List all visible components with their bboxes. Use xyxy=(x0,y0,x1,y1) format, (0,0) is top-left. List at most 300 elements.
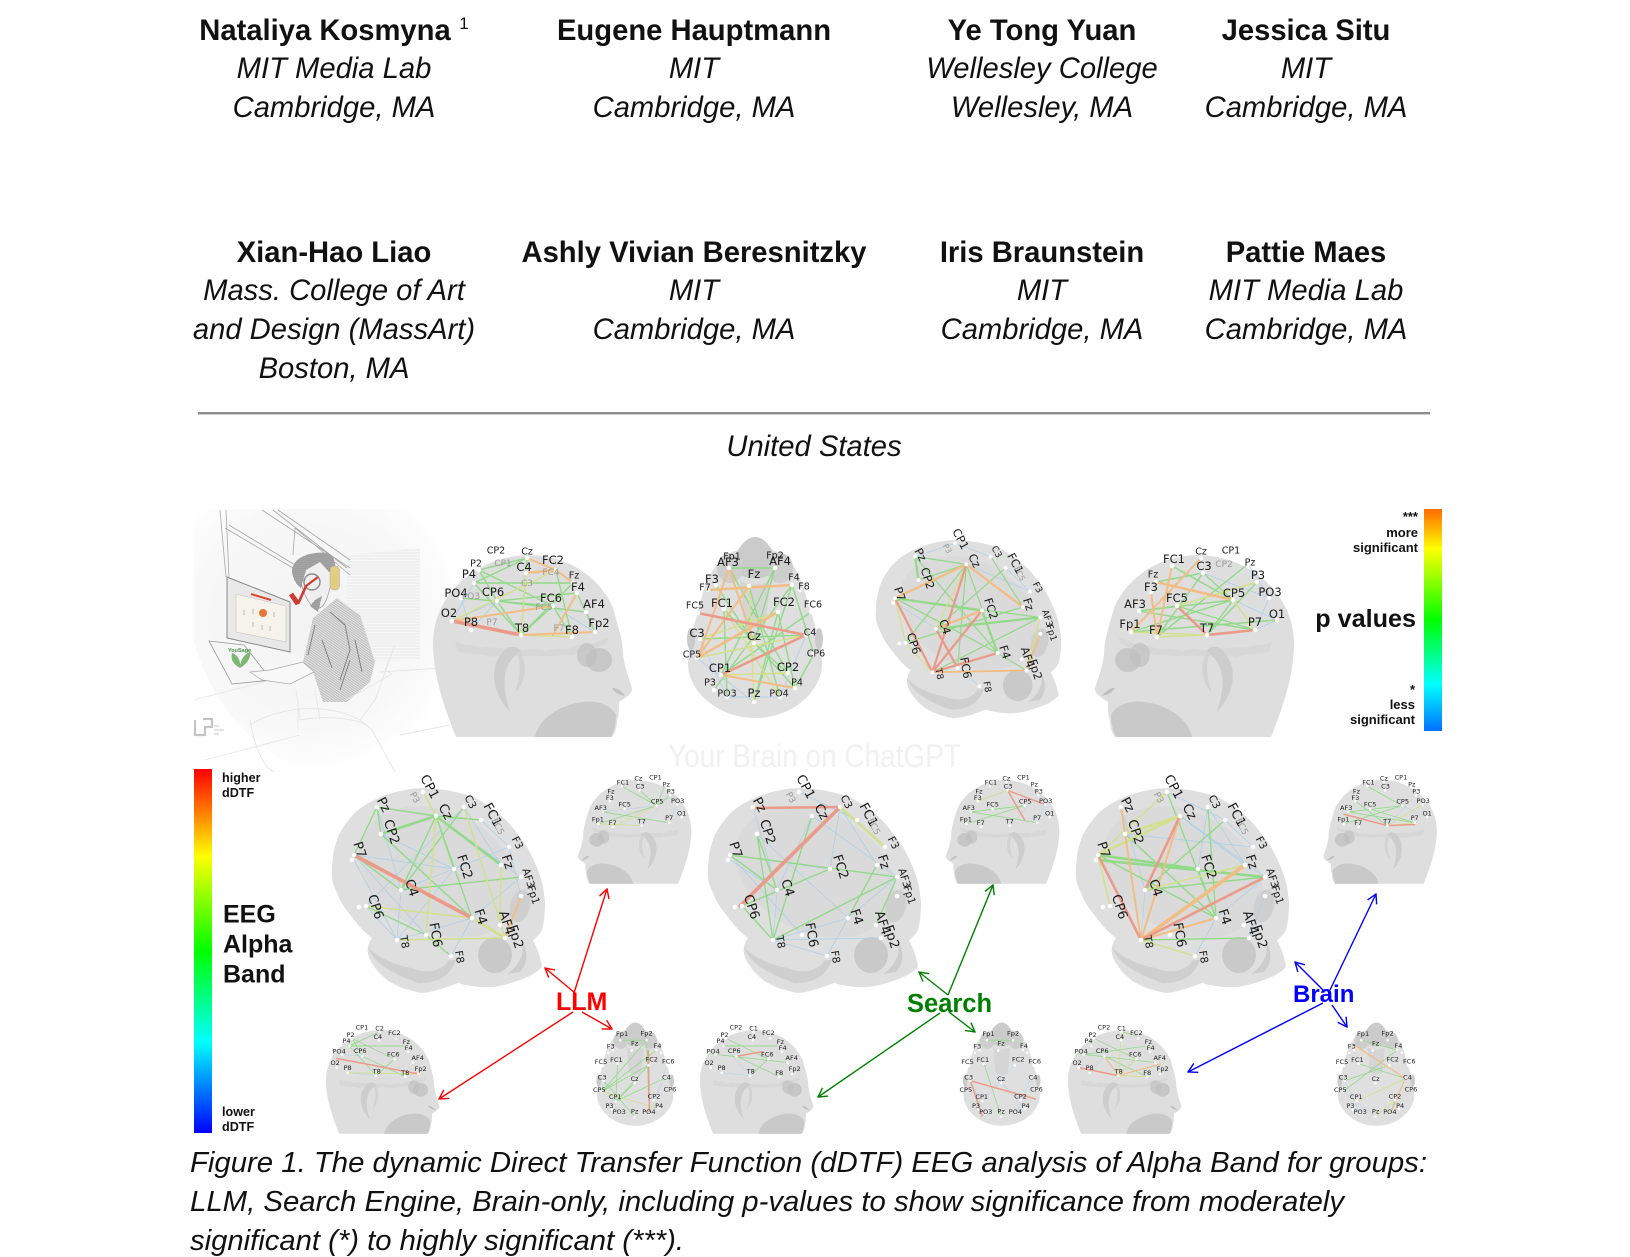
illustration: person wearing EEG at a computer: YouSage xyxy=(228,648,251,654)
small left-side head: Search: Cz xyxy=(1002,774,1011,782)
small top-view head: Search: Cz xyxy=(997,1075,1006,1083)
small left-side head: Search: CP1 xyxy=(1017,774,1030,782)
small top-view head: Search: PO4 xyxy=(1009,1108,1022,1116)
small left-side head: Search: Fz xyxy=(975,787,983,795)
small right-side head: Search: F4 xyxy=(779,1044,787,1052)
big three-quarter head: Brain: Pz xyxy=(1117,795,1137,815)
brain head: top view, top row: CP6 xyxy=(807,648,825,660)
big three-quarter head: Brain: P7 xyxy=(1093,840,1113,860)
small right-side head: Search: P8 xyxy=(718,1064,726,1072)
big three-quarter head: Brain: AF3 xyxy=(1263,867,1281,889)
small right-side head: Brain: F4 xyxy=(1147,1044,1155,1052)
small top-view head: LLM: P4 xyxy=(655,1102,663,1110)
brain head: three-quarter view, top row: Cz xyxy=(965,552,983,570)
brain head: top view, top row: F8 xyxy=(798,582,810,592)
small top-view head: Search: FC5 xyxy=(961,1058,974,1066)
brain head: left side view, top row: CP2 xyxy=(1215,560,1233,570)
brain head: left side view, top row: C3 xyxy=(1196,559,1212,573)
big three-quarter head: Brain: Fp2 xyxy=(1248,923,1270,951)
big three-quarter head: Search: AF4 xyxy=(871,909,893,937)
p values colour bar and legend: *** xyxy=(1403,509,1419,524)
small left-side head: LLM: Cz xyxy=(634,774,643,782)
brain head: right side view, top row: O2 xyxy=(441,606,457,620)
figure caption: LLM, Search Engine, Brain-only, including p-values to show significance from moderately xyxy=(190,1186,1346,1218)
brain head: top view, top row xyxy=(683,537,825,718)
small right-side head: LLM: P4 xyxy=(342,1037,351,1045)
author: Iris Braunstein xyxy=(940,237,1144,346)
p values colour bar and legend: significant xyxy=(1353,540,1419,555)
brain head: top view, top row: C4 xyxy=(804,628,816,638)
p values colour bar and legend: p values xyxy=(1315,605,1416,633)
author: Ashly Vivian Beresnitzky: MIT xyxy=(669,275,721,307)
p values colour bar and legend: more xyxy=(1386,525,1418,540)
brain head: top view, top row: P4 xyxy=(791,678,803,688)
small top-view head: Brain: Fp2 xyxy=(1382,1029,1394,1037)
small top-view head: Search: FC1 xyxy=(977,1056,989,1064)
big three-quarter head: Search: Fz xyxy=(874,853,892,871)
EEG alpha band colour bar and legend: higher xyxy=(222,771,261,785)
brain head: three-quarter view, top row: CP1 xyxy=(949,526,971,552)
small top-view head: LLM: FC5 xyxy=(595,1058,607,1066)
brain head: left side view, top row: PO3 xyxy=(1258,585,1282,599)
small right-side head: LLM: Fp2 xyxy=(415,1065,427,1073)
small left-side head: Search: P7 xyxy=(1033,814,1041,822)
brain head: three-quarter view, top row xyxy=(876,526,1061,718)
illustration: person wearing EEG at a computer xyxy=(194,509,462,772)
small right-side head: Brain: F8 xyxy=(1143,1069,1151,1077)
author: Ye Tong Yuan: Wellesley, MA xyxy=(951,92,1133,124)
big three-quarter head: LLM xyxy=(332,772,545,993)
brain head: top view, top row: CP1 xyxy=(709,661,731,675)
small top-view head: LLM: Cz xyxy=(631,1075,639,1083)
arrows: Search xyxy=(818,885,993,1097)
small right-side head: Search: Fz xyxy=(777,1038,785,1046)
small top-view head: Search: Fz xyxy=(998,1040,1005,1048)
brain head: left side view, top row xyxy=(1095,546,1294,737)
brain head: right side view, top row: FC6 xyxy=(540,591,562,605)
big three-quarter head: Search: P3 xyxy=(783,791,797,805)
big three-quarter head: LLM: CP2 xyxy=(380,818,402,846)
brain head: three-quarter view, top row: C3 xyxy=(989,544,1003,560)
big three-quarter head: Search: C3 xyxy=(837,793,855,811)
author: Ye Tong Yuan: Ye Tong Yuan xyxy=(948,15,1136,47)
big three-quarter head: Search: FC2 xyxy=(829,853,851,881)
brain head: left side view, top row: F7 xyxy=(1149,623,1163,637)
small top-view head: Brain xyxy=(1334,1023,1417,1126)
small right-side head: Search: FC6 xyxy=(761,1051,774,1059)
small left-side head: Search: F3 xyxy=(974,794,982,802)
EEG alpha band colour bar and legend xyxy=(194,769,294,1134)
small top-view head: Brain: FC6 xyxy=(1403,1057,1416,1065)
small right-side head: Brain: CP2 xyxy=(1098,1024,1110,1032)
small left-side head: Search: AF3 xyxy=(963,804,975,812)
small right-side head: Search xyxy=(700,1024,813,1134)
small left-side head: Search: CP5 xyxy=(1019,798,1032,806)
small top-view head: Search: F3 xyxy=(973,1043,981,1051)
brain head: right side view, top row: C3 xyxy=(521,579,533,589)
big three-quarter head: Search: F3 xyxy=(885,835,901,851)
brain head: top view, top row: P3 xyxy=(704,678,716,688)
small left-side head: Brain: P3 xyxy=(1412,787,1420,795)
author: Xian-Hao Liao: Xian-Hao Liao xyxy=(237,237,431,269)
label: Brain: Brain xyxy=(1293,981,1354,1008)
small top-view head: Brain: P3 xyxy=(1346,1102,1355,1110)
brain head: right side view, top row: CP2 xyxy=(487,546,505,556)
author: Jessica Situ: MIT xyxy=(1281,53,1333,85)
brain head: right side view, top row: FC2 xyxy=(542,553,564,567)
small right-side head: LLM: FC2 xyxy=(388,1029,401,1037)
small left-side head: LLM: O1 xyxy=(677,810,686,818)
small top-view head: LLM: C4 xyxy=(662,1073,671,1081)
brain head: top view, top row: FC5 xyxy=(686,600,704,612)
brain head: left side view, top row: P7 xyxy=(1248,615,1262,629)
EEG alpha band colour bar and legend: Band xyxy=(223,960,286,988)
brain head: three-quarter view, top row: FC5 xyxy=(1012,565,1027,583)
small left-side head: LLM: PO3 xyxy=(671,797,684,805)
arrows: LLM xyxy=(439,889,612,1099)
small left-side head: Search: PO3 xyxy=(1039,797,1052,805)
big three-quarter head: Brain: C3 xyxy=(1205,793,1223,811)
brain head: top view, top row: Pz xyxy=(748,686,760,700)
small top-view head: Search: P4 xyxy=(1022,1102,1030,1110)
big three-quarter head: Brain: FC6 xyxy=(1169,921,1189,949)
author: Ye Tong Yuan xyxy=(926,15,1158,124)
big three-quarter head: LLM: C4 xyxy=(401,877,421,899)
small right-side head: LLM: CP6 xyxy=(354,1047,367,1055)
small right-side head: Brain: PO4 xyxy=(1074,1048,1088,1056)
logo: MIT Media Lab: lab xyxy=(214,732,219,736)
small right-side head: Search: AF4 xyxy=(786,1054,798,1062)
small top-view head: Brain: Pz xyxy=(1372,1107,1380,1115)
small right-side head: Search: C1 xyxy=(749,1024,758,1032)
small right-side head: Brain: Fz xyxy=(1145,1038,1153,1046)
small left-side head: Brain: Fz xyxy=(1353,787,1361,795)
brain head: right side view, top row: Fp2 xyxy=(588,616,610,630)
small top-view head: Search: FC6 xyxy=(1028,1057,1041,1065)
author: Eugene Hauptmann xyxy=(557,15,831,124)
small right-side head: Brain: C4 xyxy=(1115,1033,1124,1041)
small top-view head: Search: F4 xyxy=(1020,1042,1028,1050)
small left-side head: Brain: Pz xyxy=(1408,781,1416,789)
author: Iris Braunstein: Iris Braunstein xyxy=(940,237,1144,269)
small right-side head: Search: CP6 xyxy=(728,1047,741,1055)
small right-side head: Brain xyxy=(1068,1024,1181,1134)
small left-side head: Brain: C3 xyxy=(1381,782,1390,790)
small top-view head: Brain: F3 xyxy=(1348,1043,1356,1051)
brain head: top view, top row: FC2 xyxy=(773,595,795,609)
small top-view head: LLM: Fp1 xyxy=(616,1030,628,1038)
brain head: top view, top row: F7 xyxy=(699,582,711,594)
big three-quarter head: Search: FC5 xyxy=(865,817,881,837)
country line: United States xyxy=(726,431,902,463)
small top-view head: Brain: F4 xyxy=(1394,1042,1402,1050)
small left-side head: LLM: P7 xyxy=(665,814,673,822)
big three-quarter head: LLM: P7 xyxy=(349,840,369,860)
LLM group brain maps xyxy=(326,772,691,1134)
small top-view head: LLM: CP5 xyxy=(593,1086,606,1094)
author: Iris Braunstein: Cambridge, MA xyxy=(941,314,1143,346)
small top-view head: Search: C3 xyxy=(964,1073,973,1081)
brain head: right side view, top row: Fz xyxy=(569,570,579,582)
author: Jessica Situ xyxy=(1205,15,1407,124)
small right-side head: LLM: Fz xyxy=(403,1038,411,1046)
brain head: right side view, top row: PO4 xyxy=(444,586,468,600)
brain head: three-quarter view, top row: T8 xyxy=(932,667,944,681)
authors: second row xyxy=(193,237,1407,385)
small left-side head: Brain: O1 xyxy=(1423,810,1432,818)
big three-quarter head: LLM: C3 xyxy=(461,793,479,811)
small top-view head: LLM: P3 xyxy=(605,1102,614,1110)
brain head: three-quarter view, top row: Fp2 xyxy=(1026,658,1044,682)
small top-view head: Search xyxy=(959,1023,1043,1126)
small left-side head: LLM: C3 xyxy=(636,782,644,790)
big three-quarter head: LLM: Cz xyxy=(435,801,455,823)
big three-quarter head: LLM: FC1 xyxy=(480,801,504,829)
small top-view head: LLM: F3 xyxy=(607,1043,615,1051)
small top-view head: Brain: P4 xyxy=(1396,1102,1404,1110)
big three-quarter head: Brain: AF4 xyxy=(1239,909,1261,937)
brain head: top view, top row: F4 xyxy=(788,572,800,584)
brain head: right side view, top row: PO3 xyxy=(462,592,480,602)
big three-quarter head: Search: CP2 xyxy=(756,818,778,846)
brain head: left side view, top row: FC5 xyxy=(1166,591,1188,605)
author: Ye Tong Yuan: Wellesley College xyxy=(926,53,1158,85)
small top-view head: Brain: PO4 xyxy=(1383,1108,1397,1116)
small right-side head: LLM: P2 xyxy=(346,1031,355,1039)
small top-view head: Brain: Fp1 xyxy=(1357,1030,1369,1038)
logo: MIT Media Lab: media xyxy=(214,728,224,732)
small top-view head: LLM: CP1 xyxy=(609,1093,622,1101)
small top-view head: Search: CP5 xyxy=(959,1086,972,1094)
brain head: top view, top row: CP5 xyxy=(683,650,701,660)
author: Nataliya Kosmyna: Nataliya Kosmyna xyxy=(199,15,451,47)
big three-quarter head: LLM: Pz xyxy=(373,795,393,815)
brain head: three-quarter view, top row: AF3 xyxy=(1039,609,1054,628)
Search group brain maps xyxy=(700,772,1059,1134)
small right-side head: LLM: P8 xyxy=(344,1064,352,1072)
small left-side head: Brain: FC5 xyxy=(1364,801,1376,809)
small right-side head: LLM: PO4 xyxy=(332,1048,346,1056)
small top-view head: Search: PO3 xyxy=(979,1108,992,1116)
small top-view head: Search: Fp1 xyxy=(983,1030,995,1038)
brain head: right side view, top row: P7 xyxy=(486,618,498,628)
small top-view head: Brain: FC1 xyxy=(1351,1056,1364,1064)
big three-quarter head: Brain: CP2 xyxy=(1124,818,1146,846)
small top-view head: LLM: CP6 xyxy=(664,1085,676,1093)
small top-view head: LLM: FC2 xyxy=(645,1056,658,1064)
big three-quarter head: Brain: C4 xyxy=(1145,877,1165,899)
small left-side head: Brain: Cz xyxy=(1380,774,1388,782)
small right-side head: Search: PO4 xyxy=(706,1048,720,1056)
big three-quarter head: Search: Pz xyxy=(749,795,769,815)
brain head: right side view, top row: F4 xyxy=(571,580,585,594)
small right-side head: Brain: O2 xyxy=(1072,1059,1082,1067)
small right-side head: Search: F8 xyxy=(775,1069,783,1077)
brain head: top view, top row: Cz xyxy=(747,629,761,643)
small left-side head: Search: O1 xyxy=(1045,810,1054,818)
small left-side head: Search: F7 xyxy=(977,819,985,827)
brain head: top view, top row: Fp2 xyxy=(766,550,784,562)
EEG alpha band colour bar and legend: dDTF xyxy=(222,786,254,800)
small top-view head: Search: P3 xyxy=(972,1102,980,1110)
big three-quarter head: Search: AF3 xyxy=(895,867,913,889)
brain head: left side view, top row: O1 xyxy=(1269,607,1285,621)
brain head: three-quarter view, top row: F3 xyxy=(1030,581,1044,595)
label: Search: Search xyxy=(907,990,992,1018)
big three-quarter head: LLM: Fz xyxy=(498,853,516,871)
big three-quarter head: Search: Fp2 xyxy=(880,923,902,951)
small left-side head: Brain: CP1 xyxy=(1395,774,1407,782)
big three-quarter head: Brain: CP1 xyxy=(1160,772,1186,802)
small left-side head: Brain xyxy=(1323,774,1437,884)
author: Jessica Situ: Jessica Situ xyxy=(1222,15,1390,47)
small right-side head: Brain: FC2 xyxy=(1130,1029,1143,1037)
brain head: left side view, top row: AF3 xyxy=(1124,597,1146,611)
brain head: left side view, top row: Cz xyxy=(1195,546,1207,558)
brain head: top view, top row: PO3 xyxy=(717,688,737,700)
small right-side head: Search: Fp2 xyxy=(789,1065,801,1073)
Brain-only group brain maps xyxy=(1068,772,1437,1134)
big three-quarter head: Brain: T8 xyxy=(1141,934,1155,949)
author: Pattie Maes: MIT Media Lab xyxy=(1209,275,1403,307)
small top-view head: LLM: C3 xyxy=(598,1073,607,1081)
brain head: three-quarter view, top row: F4 xyxy=(996,644,1013,661)
big three-quarter head: Brain: FC5 xyxy=(1233,817,1249,837)
big three-quarter head: Search: F8 xyxy=(828,950,842,964)
small top-view head: Brain: CP6 xyxy=(1405,1085,1417,1093)
author: Ashly Vivian Beresnitzky: Ashly Vivian Beresnitzky xyxy=(521,237,867,269)
small top-view head: Search: CP2 xyxy=(1014,1093,1027,1101)
brain head: right side view, top row: C4 xyxy=(516,560,532,574)
small right-side head: Search: C4 xyxy=(747,1033,756,1041)
big three-quarter head: Brain: FC1 xyxy=(1224,801,1248,829)
brain head: left side view, top row: T7 xyxy=(1199,621,1214,635)
author: Eugene Hauptmann: Eugene Hauptmann xyxy=(557,15,831,47)
brain head: three-quarter view, top row: FC1 xyxy=(1004,551,1026,576)
logo: MIT Media Lab xyxy=(195,719,224,736)
small left-side head: Brain: AF3 xyxy=(1340,804,1352,812)
EEG alpha band colour bar and legend: dDTF xyxy=(222,1120,254,1134)
author: Eugene Hauptmann: MIT xyxy=(669,53,721,85)
small right-side head: LLM: T8 xyxy=(372,1068,381,1076)
brain head: top view, top row: FC6 xyxy=(804,600,822,610)
author: Nataliya Kosmyna: 1 xyxy=(459,14,469,33)
brain head: three-quarter view, top row: FC2 xyxy=(981,596,1000,621)
brain head: right side view, top row: F7 xyxy=(554,624,564,634)
small top-view head: Search: CP6 xyxy=(1030,1085,1043,1093)
brain head: left side view, top row: CP1 xyxy=(1222,546,1240,556)
small top-view head: LLM: PO4 xyxy=(642,1108,656,1116)
big three-quarter head: LLM: CP1 xyxy=(416,772,442,802)
big three-quarter head: LLM: Fp1 xyxy=(524,884,542,906)
small right-side head: Search: P4 xyxy=(716,1037,725,1045)
big three-quarter head: Search: CP6 xyxy=(740,893,762,921)
big three-quarter head: Brain: Fz xyxy=(1242,853,1260,871)
brain head: top view, top row: C3 xyxy=(689,626,705,640)
brain head: three-quarter view, top row: F8 xyxy=(980,681,992,694)
small right-side head: LLM: FC6 xyxy=(387,1051,400,1059)
big three-quarter head: LLM: CP6 xyxy=(364,893,386,921)
brain head: left side view, top row: Fp1 xyxy=(1119,617,1141,631)
big three-quarter head: Search: T8 xyxy=(773,934,787,949)
small left-side head: LLM: CP1 xyxy=(649,774,662,782)
small left-side head: LLM: Fp1 xyxy=(592,815,604,823)
big three-quarter head: LLM: F3 xyxy=(509,835,525,851)
small right-side head: LLM: T8 xyxy=(400,1069,409,1077)
brain head: right side view, top row: AF4 xyxy=(583,597,605,611)
brain head: right side view, top row: FC5 xyxy=(535,603,553,613)
big three-quarter head: Brain: F3 xyxy=(1253,835,1269,851)
authors: first row xyxy=(199,14,1407,124)
author: Xian-Hao Liao: Boston, MA xyxy=(259,353,409,385)
big three-quarter head: Search: P7 xyxy=(725,840,745,860)
author: Xian-Hao Liao xyxy=(193,237,475,385)
small right-side head: Search: P2 xyxy=(720,1031,729,1039)
small right-side head: Brain: Fp2 xyxy=(1157,1065,1169,1073)
small left-side head: Search: FC1 xyxy=(985,778,997,786)
small left-side head: LLM xyxy=(578,774,691,884)
small left-side head: LLM: AF3 xyxy=(595,804,607,812)
small top-view head: LLM xyxy=(593,1023,676,1126)
brain head: three-quarter view, top row: FC6 xyxy=(957,656,974,680)
big three-quarter head: LLM: AF4 xyxy=(495,909,517,937)
small right-side head: LLM: AF4 xyxy=(412,1054,424,1062)
small top-view head: Search: CP1 xyxy=(975,1093,988,1101)
small right-side head: Search: FC2 xyxy=(762,1029,775,1037)
small right-side head: Brain: P4 xyxy=(1084,1037,1093,1045)
small right-side head: Search: O2 xyxy=(704,1059,714,1067)
brain head: three-quarter view, top row: P7 xyxy=(891,585,908,603)
small left-side head: LLM: Fz xyxy=(607,787,615,795)
small top-view head: Search: Fp2 xyxy=(1007,1029,1019,1037)
brain head: left side view, top row: P3 xyxy=(1251,568,1265,582)
small top-view head: LLM: Fz xyxy=(631,1040,639,1048)
small top-view head: Search: FC2 xyxy=(1012,1056,1024,1064)
big three-quarter head: Search xyxy=(708,772,921,993)
author: Jessica Situ: Cambridge, MA xyxy=(1205,92,1407,124)
small right-side head: Brain: CP6 xyxy=(1096,1047,1109,1055)
author: Iris Braunstein: MIT xyxy=(1017,275,1069,307)
brain head: left side view, top row: FC1 xyxy=(1163,552,1185,566)
logo: MIT Media Lab: mit xyxy=(214,724,219,728)
big three-quarter head: Search: F4 xyxy=(846,907,866,927)
small top-view head: Brain: Fz xyxy=(1372,1040,1380,1048)
author: Xian-Hao Liao: Mass. College of Art xyxy=(203,275,467,307)
small top-view head: Brain: FC2 xyxy=(1386,1056,1399,1064)
author: Xian-Hao Liao: and Design (MassArt) xyxy=(193,314,475,346)
p values colour bar and legend: * xyxy=(1410,682,1416,697)
author: Ashly Vivian Beresnitzky: Cambridge, MA xyxy=(593,314,795,346)
figure caption xyxy=(190,1147,1427,1257)
EEG alpha band colour bar and legend: lower xyxy=(222,1105,255,1119)
big three-quarter head: Brain: Fp1 xyxy=(1268,884,1286,906)
author: Eugene Hauptmann: Cambridge, MA xyxy=(593,92,795,124)
watermark title: Your Brain on ChatGPT xyxy=(668,738,961,774)
small left-side head: LLM: FC1 xyxy=(617,778,629,786)
small right-side head: LLM: F4 xyxy=(405,1044,413,1052)
big three-quarter head: Search: Cz xyxy=(811,801,831,823)
big three-quarter head: Search: CP1 xyxy=(792,772,818,802)
small right-side head: Brain: C1 xyxy=(1117,1024,1126,1032)
brain head: right side view, top row xyxy=(433,546,632,737)
small left-side head: LLM: FC5 xyxy=(618,801,631,809)
big three-quarter head: LLM: Fp2 xyxy=(504,923,526,951)
arrows: Brain xyxy=(1188,894,1376,1072)
brain head: right side view, top row: CP1 xyxy=(494,559,512,569)
brain head: left side view, top row: CP5 xyxy=(1223,586,1245,600)
small top-view head: LLM: FC1 xyxy=(610,1056,623,1064)
brain head: right side view, top row: FC4 xyxy=(542,568,560,578)
